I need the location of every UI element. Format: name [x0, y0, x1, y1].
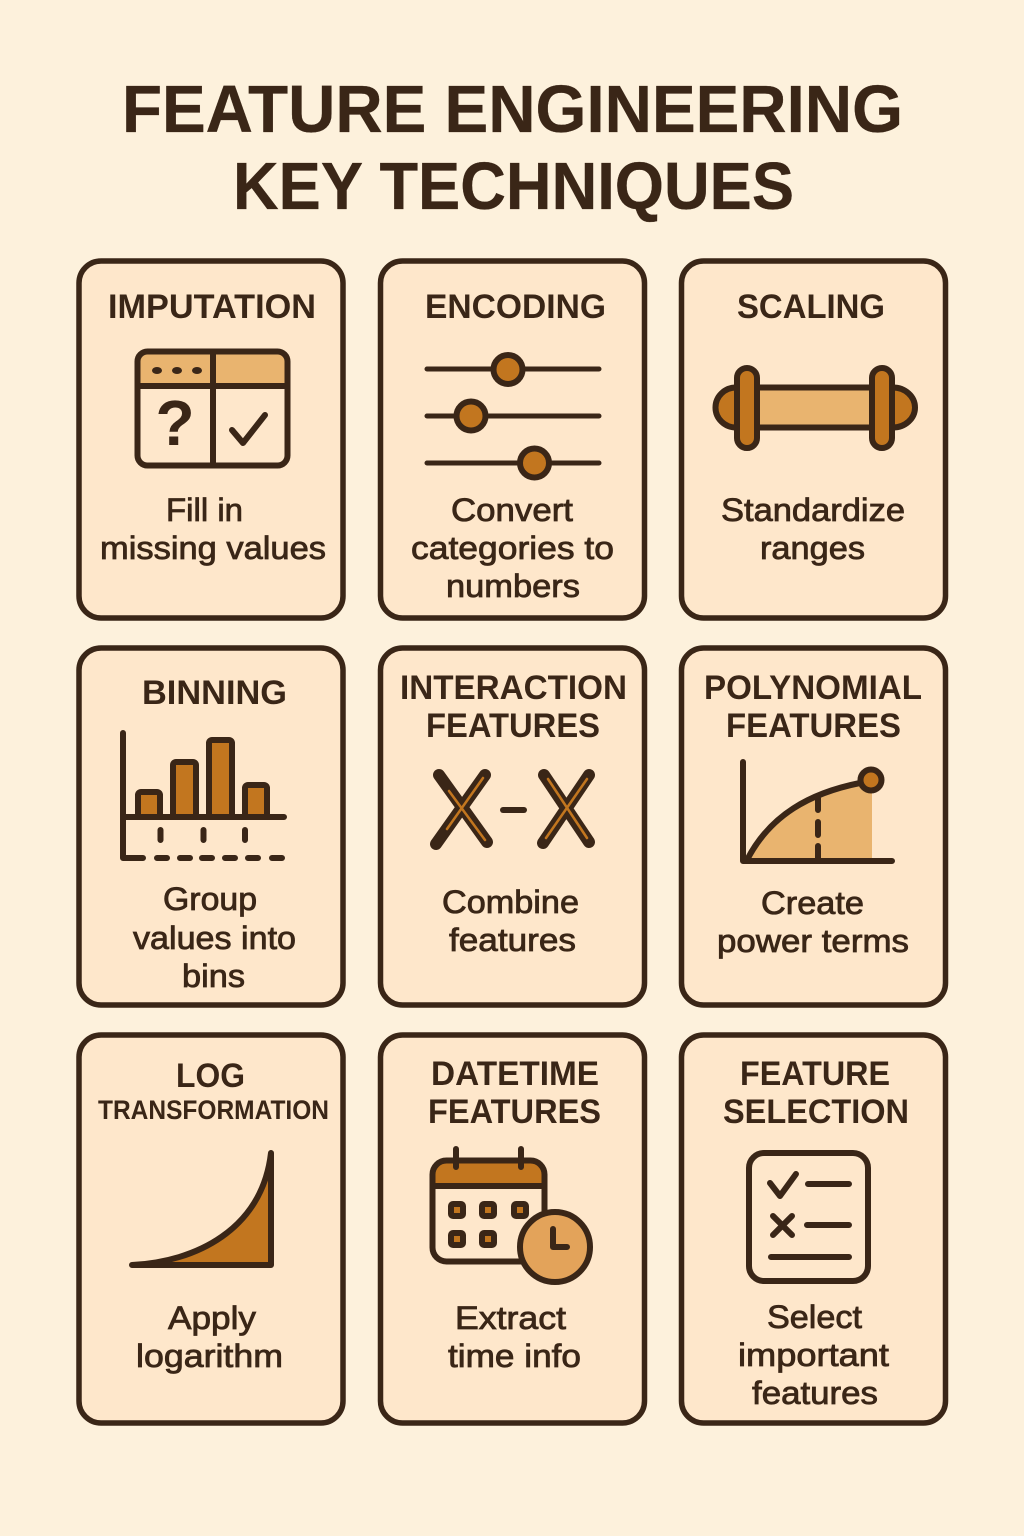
heading: imputation: IMPUTATION [108, 288, 316, 326]
description: datetime features: Extract [455, 1300, 566, 1336]
description: interaction features [442, 884, 579, 958]
description: feature selection: Select [767, 1299, 862, 1335]
heading: log transformation: LOG [176, 1057, 245, 1095]
description: encoding: numbers [446, 568, 580, 604]
heading: feature selection [723, 1055, 909, 1131]
description: encoding [411, 492, 614, 604]
description: polynomial features: Create [761, 885, 864, 921]
description: log transformation: Apply [168, 1300, 257, 1336]
description: binning: bins [182, 958, 245, 994]
description: binning: Group [163, 881, 257, 917]
heading: log transformation: TRANSFORMATION [98, 1095, 329, 1125]
heading: datetime features [428, 1055, 601, 1131]
title [122, 72, 903, 224]
description: polynomial features: power terms [717, 923, 909, 959]
description: polynomial features [717, 885, 909, 959]
heading: log transformation [98, 1057, 329, 1125]
heading: interaction features: FEATURES [426, 707, 600, 745]
description: log transformation [136, 1300, 283, 1374]
icon: sliders [427, 355, 599, 478]
description: imputation: missing values [100, 530, 326, 566]
panel: imputation [79, 261, 343, 618]
description: scaling: Standardize [721, 492, 905, 528]
heading: datetime features: FEATURES [428, 1093, 601, 1131]
heading: feature selection: FEATURE [740, 1055, 890, 1093]
icon: histogram with bins [123, 733, 284, 858]
description: encoding: Convert [451, 492, 573, 528]
description: imputation [100, 492, 326, 566]
description: scaling: ranges [760, 530, 865, 566]
description: interaction features: Combine [442, 884, 579, 920]
description: binning [133, 881, 296, 994]
heading: polynomial features: POLYNOMIAL [704, 669, 922, 707]
icon: table with missing value: ? [155, 387, 195, 459]
icon: dumbbell [716, 368, 915, 448]
panel: feature selection [682, 1035, 946, 1423]
icon: x times x [436, 775, 589, 844]
title: KEY TECHNIQUES [233, 149, 794, 224]
description: interaction features: features [449, 922, 576, 958]
panel: binning [79, 648, 343, 1005]
heading: encoding: ENCODING [425, 288, 606, 326]
description: feature selection: features [752, 1375, 878, 1411]
panel: scaling [682, 261, 946, 618]
heading: polynomial features [704, 669, 922, 745]
icon: table with missing value [138, 352, 288, 466]
panel: encoding [380, 261, 644, 618]
panel: datetime features [380, 1035, 644, 1423]
heading: feature selection: SELECTION [723, 1093, 909, 1131]
description: encoding: categories to [411, 530, 614, 566]
description: feature selection [738, 1299, 889, 1411]
heading: datetime features: DATETIME [431, 1055, 599, 1093]
panel: log transformation [79, 1035, 343, 1423]
description: feature selection: important [738, 1337, 889, 1373]
description: imputation: Fill in [166, 492, 243, 528]
heading: scaling: SCALING [737, 288, 885, 326]
description: scaling [721, 492, 905, 566]
heading: interaction features [400, 669, 627, 745]
icon: checklist [749, 1153, 868, 1281]
panel: polynomial features [682, 648, 946, 1005]
heading: polynomial features: FEATURES [726, 707, 901, 745]
description: datetime features [448, 1300, 581, 1374]
panel: interaction features [380, 648, 644, 1005]
icon: polynomial curve [743, 762, 892, 861]
description: binning: values into [133, 920, 296, 956]
description: log transformation: logarithm [136, 1338, 283, 1374]
description: datetime features: time info [448, 1338, 581, 1374]
title: FEATURE ENGINEERING [122, 72, 903, 147]
heading: interaction features: INTERACTION [400, 669, 627, 707]
icon: log curve [131, 1153, 271, 1265]
icon: calendar and clock [432, 1149, 590, 1282]
heading: binning: BINNING [142, 674, 287, 712]
